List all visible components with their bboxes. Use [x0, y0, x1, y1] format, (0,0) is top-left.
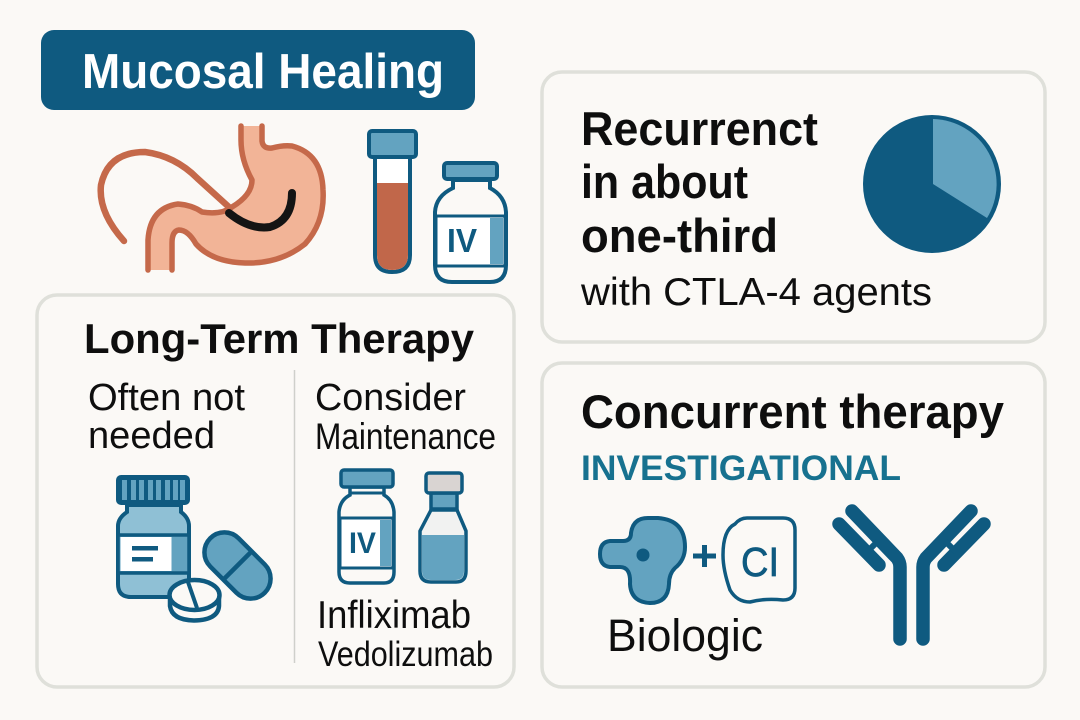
icon: stomach with endoscope — [101, 126, 323, 270]
panel: long-term therapy — [37, 295, 514, 687]
text: drug names: Infliximab — [317, 594, 471, 637]
icon: pill bottle and pills — [116, 475, 279, 620]
icon: IV vial — [435, 163, 506, 282]
icon: biologic molecule — [600, 518, 685, 603]
heading: long-term therapy: Long-Term Therapy — [84, 315, 475, 362]
icon: maintenance IV vial — [339, 470, 394, 583]
icon: IV vial: IV — [447, 222, 477, 259]
heading: concurrent therapy: Concurrent therapy — [581, 385, 1004, 438]
icon: antibody — [839, 511, 984, 639]
title banner — [41, 30, 475, 110]
text: drug names — [317, 594, 493, 674]
text: with CTLA-4 agents: with CTLA-4 agents — [580, 271, 932, 314]
panel: mucosal healing — [41, 30, 506, 282]
text: often not needed — [88, 377, 245, 457]
text: consider maintenance: Maintenance — [315, 416, 496, 457]
icon: maintenance IV vial: IV — [349, 527, 376, 560]
icon: checkpoint inhibitor box: CI — [741, 539, 779, 585]
text: often not needed: needed — [88, 415, 215, 457]
label: investigational: INVESTIGATIONAL — [581, 449, 901, 488]
heading: recurrence — [581, 102, 818, 262]
icon: blood tube — [369, 131, 416, 272]
heading: recurrence: in about — [581, 155, 748, 208]
heading: recurrence: one-third — [581, 209, 778, 262]
title banner: Mucosal Healing — [82, 45, 444, 99]
text: consider maintenance — [315, 377, 496, 457]
icon: checkpoint inhibitor box — [723, 518, 795, 602]
icon: round tablet — [170, 580, 220, 620]
text: consider maintenance: Consider — [315, 377, 466, 419]
panel: concurrent therapy — [542, 363, 1045, 687]
chart: one-third pie — [863, 115, 1001, 253]
icon: plus sign — [693, 545, 716, 567]
icon: maintenance bottle — [420, 473, 466, 582]
text: biologic: Biologic — [607, 610, 763, 661]
panel: recurrence — [542, 72, 1045, 342]
heading: recurrence: Recurrenct — [581, 102, 818, 155]
icon: capsule — [196, 524, 279, 607]
text: often not needed: Often not — [88, 377, 245, 419]
text: drug names: Vedolizumab — [318, 635, 493, 674]
